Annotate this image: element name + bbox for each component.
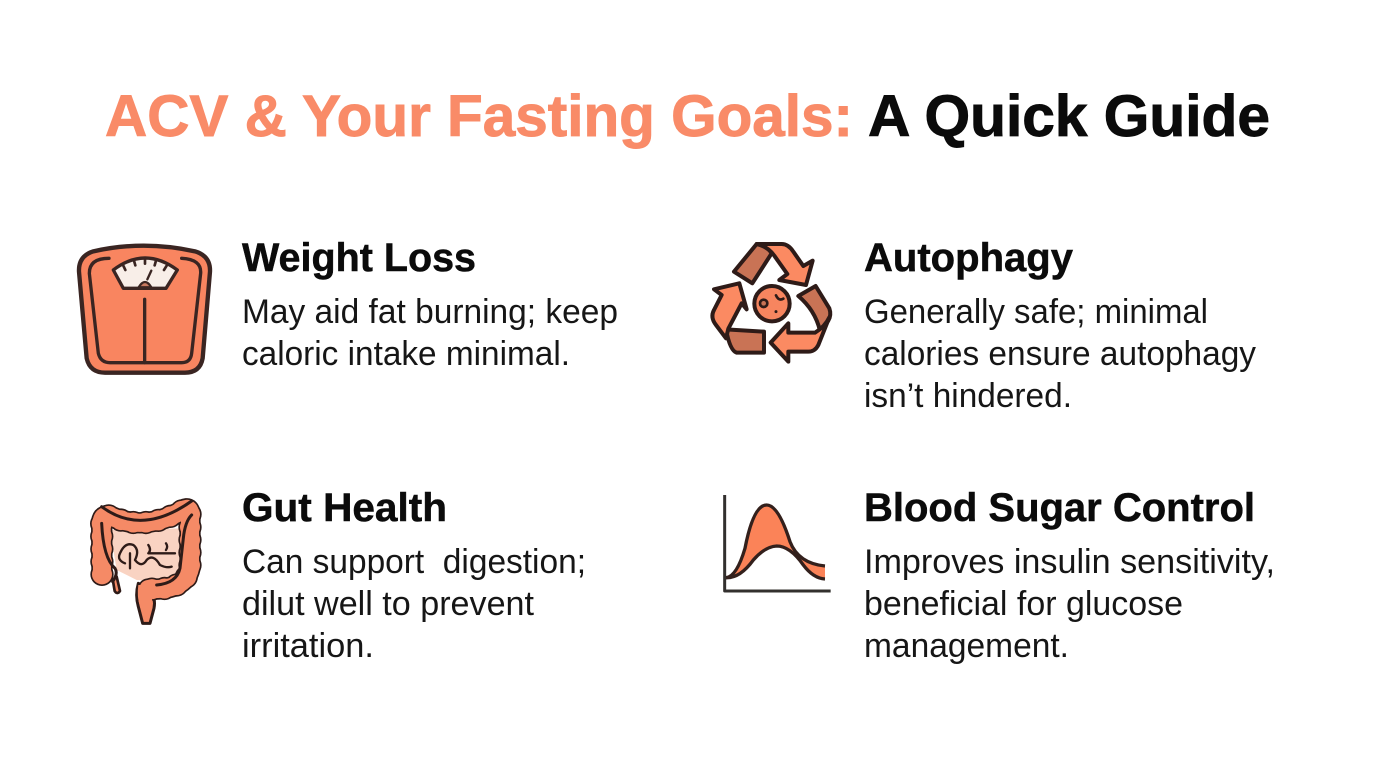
text: gut health description: Can support digestion; <box>242 543 586 581</box>
panel: autophagy <box>712 236 1256 415</box>
text: weight loss description <box>242 293 618 373</box>
panel: blood sugar control <box>725 486 1275 665</box>
icon: recycling arrows around cell <box>712 244 830 362</box>
icon: intestines <box>102 501 192 623</box>
title: A Quick Guide <box>868 84 1270 149</box>
text: weight loss description: caloric intake minimal. <box>242 335 570 373</box>
text: blood sugar description: Improves insulin sensitivity, <box>864 543 1275 581</box>
heading: weight loss: Weight Loss <box>242 236 476 280</box>
icon: bathroom scale <box>79 246 210 373</box>
text: gut health description <box>242 543 586 665</box>
text: autophagy description: calories ensure autophagy <box>864 335 1256 373</box>
text: blood sugar description <box>864 543 1275 665</box>
icon: glucose curve chart <box>725 495 831 591</box>
text: gut health description: dilut well to prevent <box>242 585 535 623</box>
panel: gut health <box>102 486 586 665</box>
text: autophagy description: Generally safe; minimal <box>864 293 1208 331</box>
text: blood sugar description: management. <box>864 627 1069 665</box>
text: gut health description: irritation. <box>242 627 374 665</box>
text: autophagy description: isn’t hindered. <box>864 377 1072 415</box>
heading: autophagy: Autophagy <box>864 236 1074 280</box>
heading: blood sugar control: Blood Sugar Control <box>864 486 1255 530</box>
panel: weight loss <box>79 236 618 373</box>
heading: gut health: Gut Health <box>242 486 447 530</box>
text: weight loss description: May aid fat burning; keep <box>242 293 618 331</box>
title <box>105 84 1270 149</box>
text: blood sugar description: beneficial for glucose <box>864 585 1183 623</box>
text: autophagy description <box>864 293 1256 415</box>
title: ACV & Your Fasting Goals: <box>105 84 853 149</box>
